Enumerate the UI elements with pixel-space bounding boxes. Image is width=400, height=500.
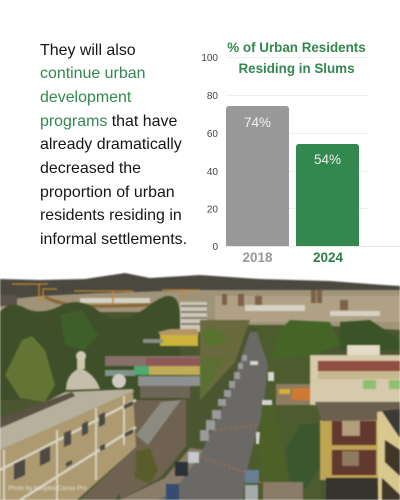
baseline <box>226 246 400 248</box>
lower facade wall <box>80 430 136 500</box>
x-axis label: 2018: 2018 <box>242 250 273 265</box>
right yellow building <box>377 409 400 500</box>
tree near pavement <box>133 448 158 484</box>
gridlines <box>226 58 368 208</box>
bar: 2018: 74% <box>244 115 271 130</box>
y-axis labels: 100 <box>201 53 218 64</box>
x-axis label: 2024: 2024 <box>313 250 344 265</box>
text block <box>40 42 187 248</box>
brown brick building <box>315 402 400 500</box>
cream building with red roof <box>310 345 400 405</box>
text block: residents residing in <box>40 207 182 224</box>
pavement <box>120 448 205 500</box>
chart title: % of Urban Residents <box>227 40 366 55</box>
distant city <box>0 290 400 330</box>
facade bands and windows <box>0 396 136 500</box>
y-axis labels: 20 <box>207 204 218 216</box>
text block: development <box>40 89 131 106</box>
right-side block behind street <box>240 325 320 500</box>
text block: already dramatically <box>40 136 182 153</box>
cranes and stadium <box>12 284 200 306</box>
tree canopy <box>0 296 180 400</box>
chart title <box>227 40 366 76</box>
text block: proportion of urban <box>40 184 175 201</box>
bar: 2024: 54% <box>314 152 341 167</box>
right-side street buildings and trees <box>258 320 400 500</box>
left building parapet <box>0 392 75 428</box>
text block: They will also <box>40 42 136 58</box>
wall beside road <box>120 400 186 500</box>
hills <box>0 273 400 310</box>
mid-ground buildings <box>105 302 207 398</box>
y-axis labels: 80 <box>207 91 218 102</box>
bar: 2018 <box>226 106 289 246</box>
left building facade <box>0 391 136 500</box>
y-axis labels: 60 <box>207 129 218 140</box>
parked cars <box>166 355 274 500</box>
text block: decreased the <box>40 160 141 177</box>
tree: mid green <box>60 310 98 350</box>
text block: programs that have <box>40 113 177 130</box>
y-axis labels <box>201 53 218 253</box>
y-axis labels: 40 <box>207 167 218 178</box>
bar: 2024 <box>296 144 359 246</box>
chart title: Residing in Slums <box>238 61 355 76</box>
text block: informal settlements. <box>40 231 187 248</box>
bar chart <box>201 40 400 265</box>
road <box>157 332 268 500</box>
y-axis labels: 0 <box>212 242 218 253</box>
photo base <box>0 295 400 500</box>
left building roof <box>0 389 134 450</box>
left-of-road trees and shops <box>200 320 250 400</box>
dome on roof <box>66 351 126 390</box>
tree: large pine <box>5 336 55 402</box>
text block: continue urban <box>40 65 145 82</box>
photo credit: Photo by benjdek/Canva Pro <box>8 485 87 492</box>
street bunting <box>200 425 272 490</box>
